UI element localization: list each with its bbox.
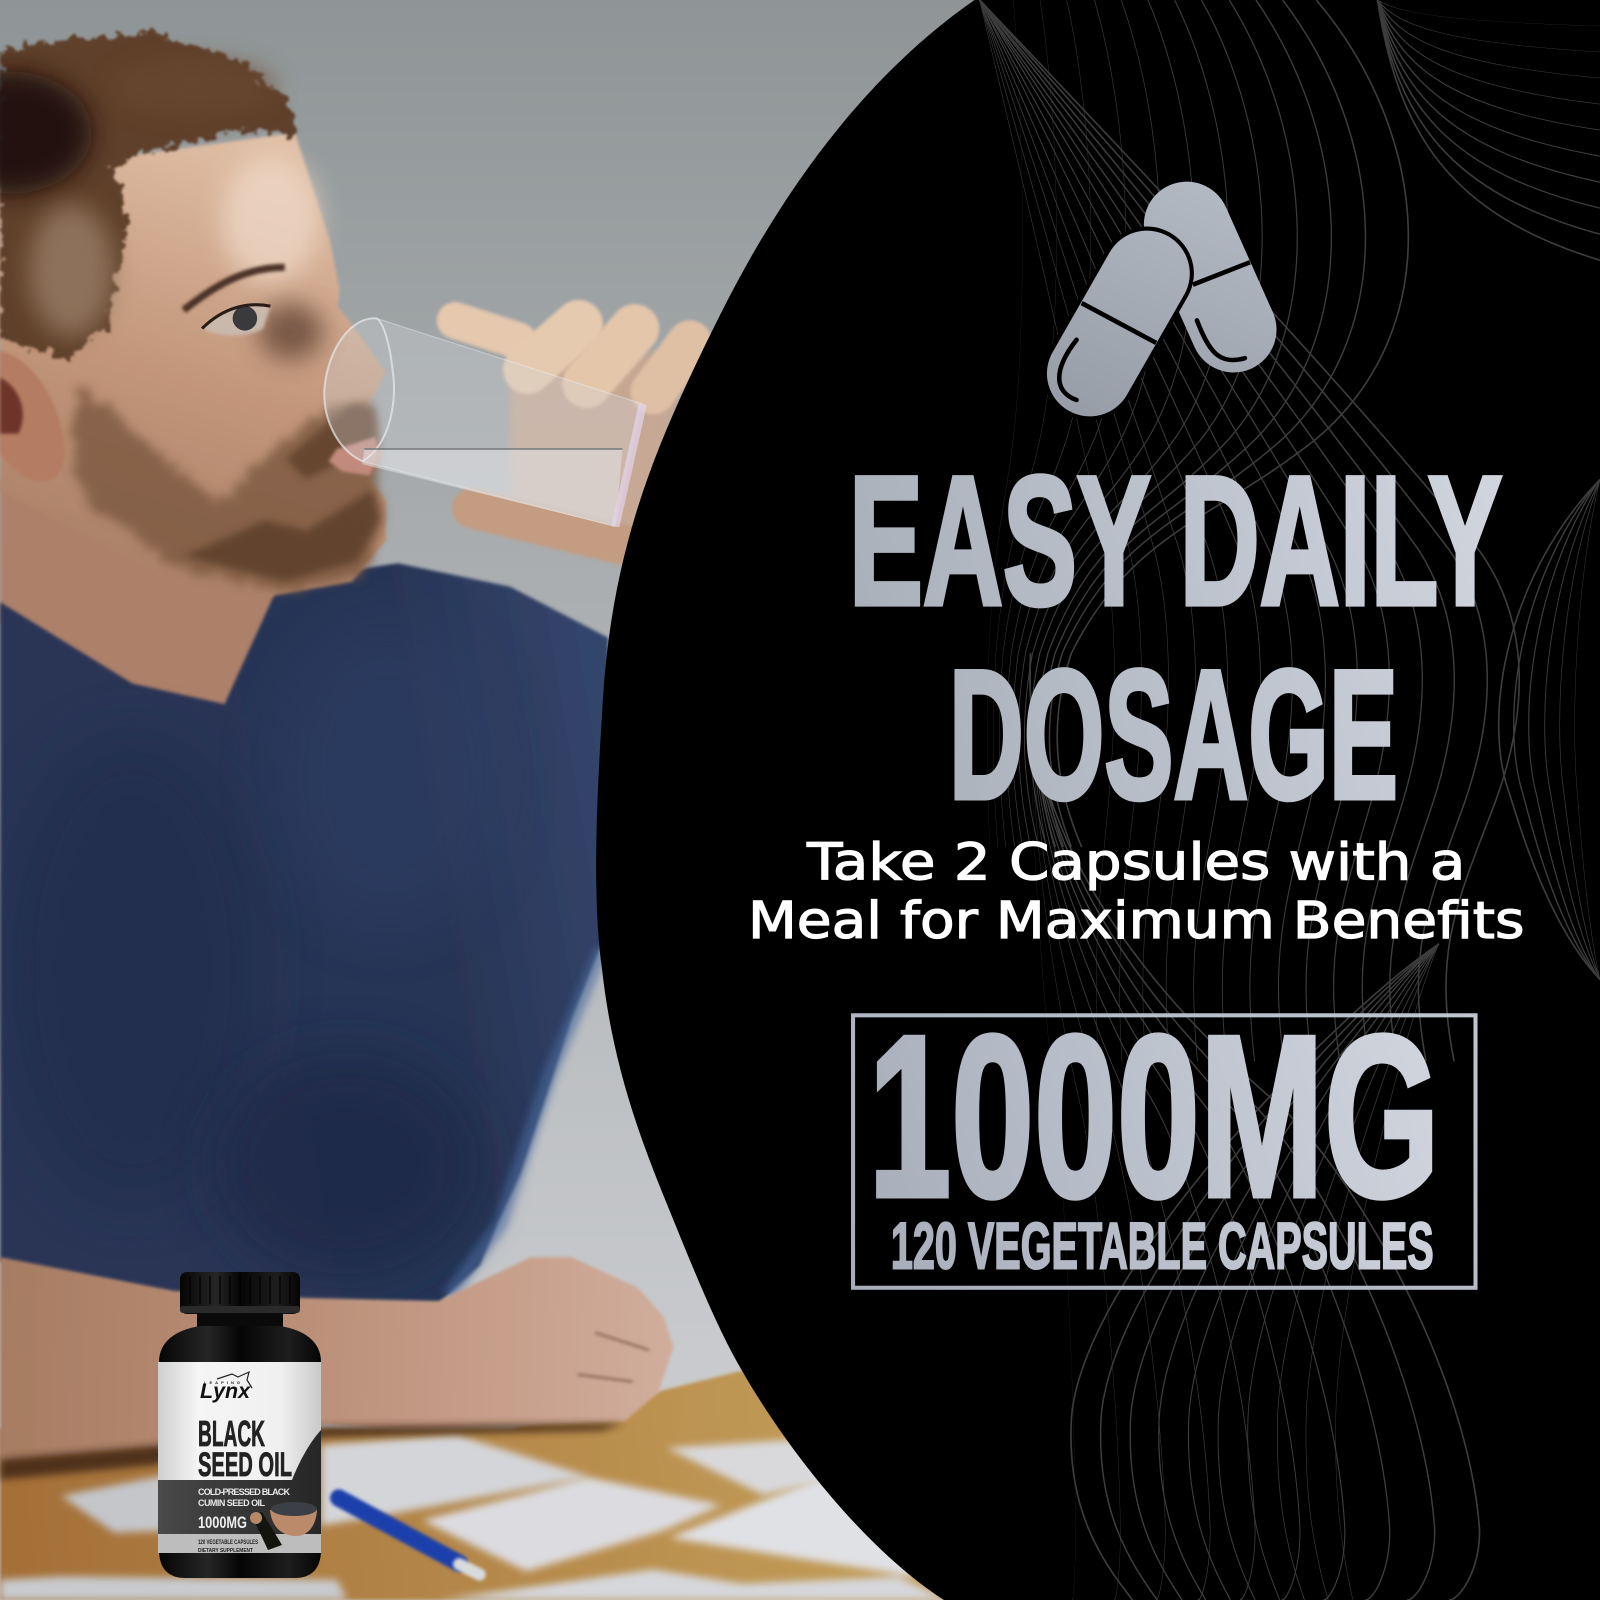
product description: CUMIN SEED OIL	[198, 1498, 266, 1508]
papers: blurred documents on the table	[0, 1435, 949, 1600]
instruction line 2: Meal for Maximum Benefits	[748, 892, 1524, 951]
forehead highlight	[221, 156, 319, 283]
capsule: right	[1187, 224, 1250, 360]
instruction line 1: Take 2 Capsules with a	[806, 834, 1465, 893]
paper: far right sheet	[666, 1440, 847, 1495]
eye and eyebrow	[184, 267, 323, 360]
ear	[0, 351, 65, 482]
neck	[0, 480, 306, 735]
label small print: DIETARY SUPPLEMENT	[198, 1548, 253, 1554]
brand logo: LEAPING	[204, 1380, 240, 1385]
t-shirt	[0, 563, 608, 1304]
head and face	[0, 133, 386, 597]
product name	[198, 1413, 292, 1484]
beard	[73, 388, 382, 592]
product bottle	[158, 1272, 321, 1578]
product name: SEED OIL	[198, 1446, 292, 1484]
bottle label	[158, 1362, 321, 1554]
capsule: left	[1059, 273, 1156, 400]
brand logo	[200, 1372, 252, 1403]
heading: easy daily dosage	[849, 438, 1502, 837]
hand holding glass	[455, 320, 694, 545]
brand logo: Lynx	[200, 1380, 251, 1403]
callout: dosage box	[853, 987, 1476, 1288]
panel: black curved background	[596, 0, 1600, 1600]
bottle cap	[180, 1272, 300, 1329]
label small print	[198, 1539, 258, 1554]
pen	[339, 1498, 480, 1574]
label small print: 120 VEGETABLE CAPSULES	[198, 1539, 258, 1546]
wooden table	[0, 1362, 969, 1600]
product description	[198, 1487, 290, 1508]
bottle body	[159, 1326, 321, 1578]
forearm and fist	[0, 1257, 673, 1480]
bowl of black seeds	[250, 1502, 317, 1550]
icon: two capsules	[1059, 224, 1250, 400]
lips	[329, 437, 380, 476]
photo: man drinking water at a table	[0, 0, 1020, 1600]
product name: BLACK	[198, 1413, 265, 1454]
hair	[0, 33, 294, 359]
label strength: 1000MG	[198, 1513, 247, 1532]
glass of water	[324, 318, 643, 527]
wave line pattern	[979, 0, 1600, 1600]
wall background	[0, 0, 1020, 1600]
product description: COLD-PRESSED BLACK	[198, 1487, 291, 1497]
instruction text	[748, 834, 1524, 951]
